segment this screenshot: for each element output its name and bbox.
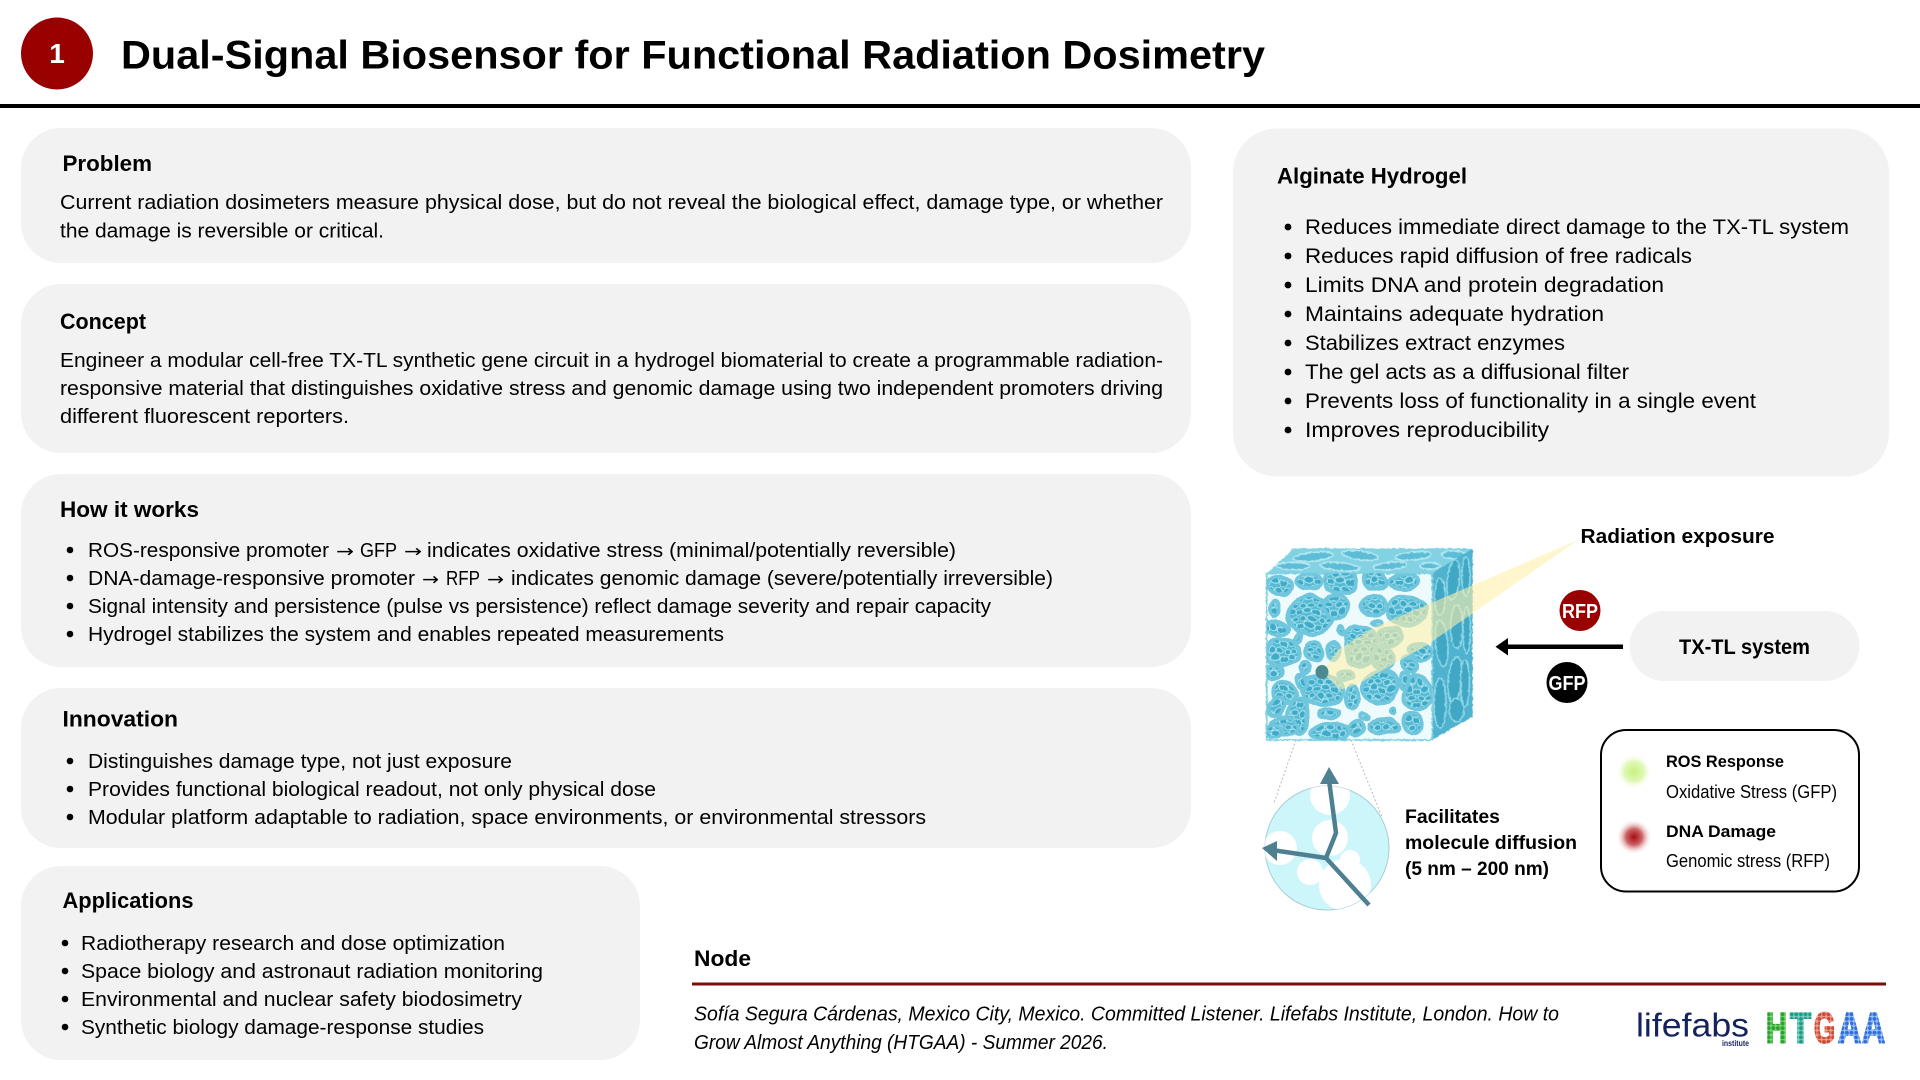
how it works bullets: Signal intensity and persistence (pulse vs persistence) reflect damage severity and repair capacity xyxy=(88,595,992,618)
how it works bullets: ROS-responsive promoter xyxy=(88,539,329,562)
alginate bullets: Maintains adequate hydration xyxy=(1305,302,1604,326)
how it works bullets: → xyxy=(422,570,439,590)
alginate bullets: Reduces rapid diffusion of free radicals xyxy=(1305,244,1692,268)
panel: applications xyxy=(21,866,640,1060)
how it works bullets: → xyxy=(487,570,504,590)
zoom guide lines xyxy=(1274,740,1382,817)
icon: GFP badge: GFP xyxy=(1548,673,1586,695)
panel: how it works xyxy=(21,474,1191,667)
section: node credits xyxy=(692,946,1886,1054)
logo: HTGAA: T xyxy=(1790,1004,1811,1052)
header rule xyxy=(0,104,1920,108)
alginate bullets: Improves reproducibility xyxy=(1305,418,1549,442)
heading: alginate hydrogel: Alginate Hydrogel xyxy=(1277,164,1467,188)
applications bullets: Radiotherapy research and dose optimization xyxy=(81,932,505,955)
legend item: DNA damage xyxy=(1616,819,1830,871)
credits text: Sofía Segura Cárdenas, Mexico City, Mexico. Committed Listener. Lifefabs Institute, London. How to xyxy=(694,1002,1559,1026)
problem text: the damage is reversible or critical. xyxy=(60,220,384,242)
alginate bullets: Prevents loss of functionality in a single event xyxy=(1305,389,1756,413)
how it works bullets: GFP xyxy=(360,539,397,562)
illustration: magnified pore xyxy=(1262,767,1389,911)
arrow: TX-TL to hydrogel xyxy=(1496,638,1623,656)
logo: lifefabs institute: lifefabs xyxy=(1636,1006,1749,1044)
logo: HTGAA: H xyxy=(1766,1004,1787,1052)
legend xyxy=(1601,730,1859,892)
legend item: DNA damage: DNA Damage xyxy=(1666,822,1776,841)
applications bullets: Space biology and astronaut radiation monitoring xyxy=(81,960,543,983)
applications bullets: Synthetic biology damage-response studies xyxy=(81,1016,484,1039)
concept text: Engineer a modular cell-free TX-TL synthetic gene circuit in a hydrogel biomaterial to create a programmable radiation- xyxy=(60,349,1163,372)
number badge xyxy=(21,18,93,90)
how it works bullets: indicates oxidative stress (minimal/potentially reversible) xyxy=(427,539,956,562)
label: facilitates molecule diffusion: (5 nm – 200 nm) xyxy=(1405,858,1549,880)
heading: concept: Concept xyxy=(60,309,147,334)
alginate bullets xyxy=(1285,215,1849,442)
how it works bullets xyxy=(67,539,1053,646)
how it works bullets: → xyxy=(404,542,422,562)
heading: node: Node xyxy=(694,946,751,971)
logo: HTGAA: A xyxy=(1838,1004,1861,1052)
how it works bullets: DNA-damage-responsive promoter xyxy=(88,567,415,590)
pill: TX-TL system: TX-TL system xyxy=(1679,636,1810,659)
concept text: responsive material that distinguishes oxidative stress and genomic damage using two independent promoters driving xyxy=(60,377,1163,400)
alginate bullets: The gel acts as a diffusional filter xyxy=(1305,360,1629,384)
logo: HTGAA xyxy=(1766,1004,1885,1052)
alginate bullets: Reduces immediate direct damage to the TX-TL system xyxy=(1305,215,1849,239)
alginate bullets: Stabilizes extract enzymes xyxy=(1305,331,1565,355)
panel: concept xyxy=(21,284,1191,453)
legend item: DNA damage: Genomic stress (RFP) xyxy=(1666,851,1830,871)
icon: RFP badge xyxy=(1560,590,1600,631)
logo: HTGAA: A xyxy=(1862,1004,1885,1052)
pill: TX-TL system xyxy=(1630,611,1860,681)
credits text: Grow Almost Anything (HTGAA) - Summer 2026. xyxy=(694,1031,1108,1054)
panel: innovation xyxy=(21,688,1191,848)
legend item: ROS response: ROS Response xyxy=(1666,752,1784,771)
innovation bullets xyxy=(67,750,926,829)
label: facilitates molecule diffusion xyxy=(1405,806,1577,880)
heading: how it works: How it works xyxy=(60,497,199,522)
label: facilitates molecule diffusion: molecule diffusion xyxy=(1405,832,1577,854)
icon: RFP badge: RFP xyxy=(1562,601,1598,623)
label: facilitates molecule diffusion: Facilitates xyxy=(1405,806,1500,828)
alginate bullets: Limits DNA and protein degradation xyxy=(1305,273,1664,297)
innovation bullets: Distinguishes damage type, not just exposure xyxy=(88,750,512,773)
header xyxy=(0,18,1920,108)
heading: problem: Problem xyxy=(62,151,152,176)
problem text xyxy=(60,191,1163,242)
how it works bullets: → xyxy=(336,542,354,562)
heading: innovation: Innovation xyxy=(62,706,178,732)
number badge: 1 xyxy=(49,38,65,69)
target spot in cube xyxy=(1316,665,1328,679)
problem text: Current radiation dosimeters measure physical dose, but do not reveal the biological effect, damage type, or whether xyxy=(60,191,1163,214)
applications bullets xyxy=(62,932,543,1039)
radiation beam xyxy=(1322,540,1578,690)
innovation bullets: Modular platform adaptable to radiation, space environments, or environmental stressors xyxy=(88,806,926,829)
illustration: hydrogel cube xyxy=(1265,548,1473,740)
how it works bullets: indicates genomic damage (severe/potentially irreversible) xyxy=(511,567,1053,590)
concept text xyxy=(60,349,1163,428)
applications bullets: Environmental and nuclear safety biodosimetry xyxy=(81,988,523,1011)
how it works bullets: RFP xyxy=(446,567,480,590)
panel: problem xyxy=(21,128,1191,263)
panel: alginate hydrogel xyxy=(1233,128,1889,476)
legend item: ROS response xyxy=(1616,752,1837,802)
legend item: ROS response: Oxidative Stress (GFP) xyxy=(1666,782,1837,802)
node rule xyxy=(692,982,1886,986)
icon: GFP badge xyxy=(1546,662,1588,703)
credits text xyxy=(694,1002,1559,1054)
concept text: different fluorescent reporters. xyxy=(60,405,349,428)
title: Dual-Signal Biosensor for Functional Radiation Dosimetry xyxy=(121,34,1266,78)
logo: HTGAA: G xyxy=(1814,1004,1835,1052)
innovation bullets: Provides functional biological readout, not only physical dose xyxy=(88,778,656,801)
logo: lifefabs institute: institute xyxy=(1722,1038,1749,1048)
label: radiation exposure: Radiation exposure xyxy=(1580,525,1774,548)
heading: applications: Applications xyxy=(62,888,194,913)
how it works bullets: Hydrogel stabilizes the system and enables repeated measurements xyxy=(88,623,724,646)
